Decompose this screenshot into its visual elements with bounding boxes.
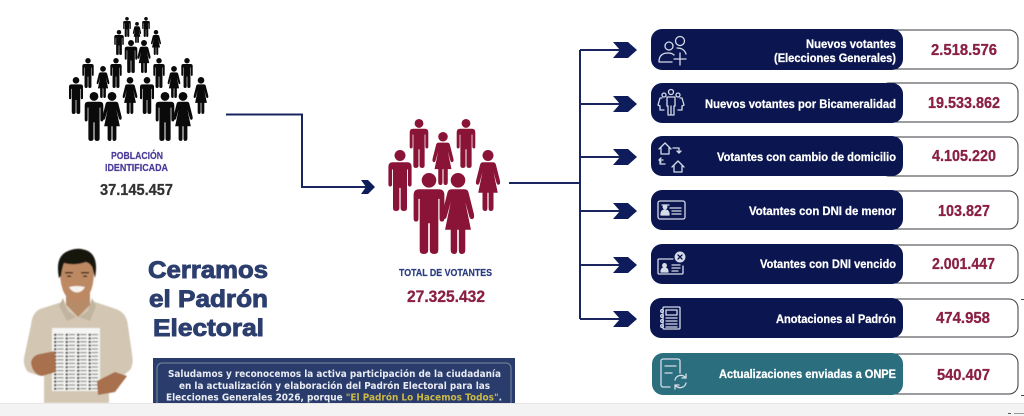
footer bar xyxy=(0,299,1024,416)
number: total de votantes: 27.325.432 xyxy=(407,287,485,306)
icon: id card xyxy=(658,201,685,219)
smile xyxy=(69,286,85,292)
icon: document with refresh xyxy=(661,359,686,389)
arrow: population to voters xyxy=(226,114,375,194)
label: población identificada: POBLACIÓN xyxy=(111,149,163,162)
icon: annotated notebook xyxy=(661,307,680,329)
face xyxy=(60,256,94,302)
row: nuevos votantes: 2.518.576 xyxy=(931,42,997,59)
label: total de votantes: TOTAL DE VOTANTES xyxy=(399,267,492,279)
row: nuevos votantes xyxy=(651,29,1018,70)
row: actualizaciones enviadas a onpe: Actualizaciones enviadas a ONPE xyxy=(719,367,896,381)
row: votantes con cambio de domicilio: Votantes con cambio de domicilio xyxy=(717,150,896,164)
title: Cerramos xyxy=(148,257,268,284)
row: votantes con dni vencido: Votantes con DNI vencido xyxy=(760,257,896,271)
row: nuevos votantes por bicameralidad xyxy=(651,83,1018,123)
label: población identificada: IDENTIFICADA xyxy=(105,163,168,174)
ballot paper xyxy=(52,328,100,391)
row: actualizaciones enviadas a onpe xyxy=(652,353,1018,395)
row: nuevos votantes por bicameralidad: Nuevos votantes por Bicameralidad xyxy=(705,97,896,111)
icon: expired id card xyxy=(658,252,685,274)
row: votantes con dni vencido: 2.001.447 xyxy=(932,256,995,273)
icon: new voters xyxy=(659,36,686,65)
shirt xyxy=(24,301,133,403)
row: votantes con dni de menor: 103.827 xyxy=(938,203,990,220)
row: anotaciones al padrón xyxy=(650,298,1018,338)
row: anotaciones al padrón: 474.958 xyxy=(936,310,990,327)
icon: crowd of identified population xyxy=(69,17,208,141)
collar xyxy=(59,298,96,321)
panel: message to citizens: en la actualización y elaboración del Padrón Electoral para las xyxy=(179,381,490,392)
icon: group of voters xyxy=(388,119,500,254)
row: votantes con cambio de domicilio: 4.105.220 xyxy=(932,148,996,165)
panel: message to citizens xyxy=(153,358,515,413)
row: votantes con dni de menor xyxy=(651,190,1018,230)
hands xyxy=(31,351,56,376)
photo: smiling man holding a ballot xyxy=(24,249,133,403)
row: nuevos votantes por bicameralidad: 19.533.862 xyxy=(928,95,1000,112)
hair xyxy=(58,249,96,278)
connector: voters to categories xyxy=(509,42,637,327)
row: anotaciones al padrón: Anotaciones al Padrón xyxy=(776,312,896,326)
title xyxy=(148,257,268,342)
eyes xyxy=(65,272,89,277)
label: población identificada xyxy=(105,149,168,174)
icon: group of people xyxy=(658,90,684,115)
row: votantes con cambio de domicilio xyxy=(651,136,1018,176)
panel: message to citizens: Elecciones Generales 2026, porque "El Padrón Lo Hacemos Todos". xyxy=(166,392,502,404)
neck xyxy=(66,292,90,317)
panel: message to citizens: Saludamos y reconocemos la activa participación de la ciudadanía xyxy=(168,369,501,380)
icon: houses with swap arrows xyxy=(659,143,684,172)
row: nuevos votantes: (Elecciones Generales) xyxy=(774,51,896,65)
row: votantes con dni vencido xyxy=(651,244,1018,284)
title: Electoral xyxy=(153,315,264,342)
row: votantes con dni de menor: Votantes con DNI de menor xyxy=(749,204,896,218)
title: el Padrón xyxy=(149,286,268,313)
row: actualizaciones enviadas a onpe: 540.407 xyxy=(937,367,990,384)
number: población identificada: 37.145.457 xyxy=(100,182,173,199)
row: nuevos votantes: Nuevos votantes xyxy=(806,37,896,51)
